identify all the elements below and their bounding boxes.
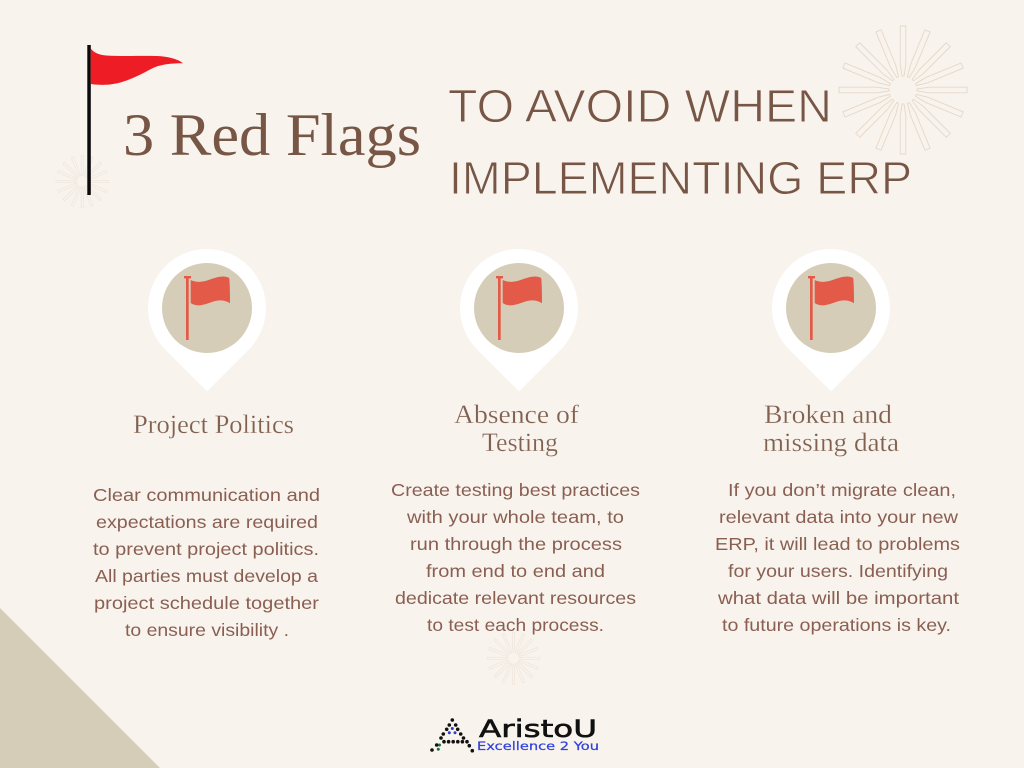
heading: broken and missing data: missing data <box>763 428 899 457</box>
starburst: beside flag <box>56 155 109 208</box>
heading: to avoid when implementing ERP <box>448 80 912 204</box>
text block: project politics <box>93 485 320 640</box>
heading: absence of testing: Testing <box>482 428 558 457</box>
logo: AristoU <box>430 715 599 753</box>
text block: absence of testing: run through the process <box>410 534 622 554</box>
text block: project politics: project schedule together <box>94 593 319 613</box>
starburst: middle column <box>487 632 540 685</box>
panel: project politics <box>93 410 320 640</box>
text block: broken and missing data <box>715 480 960 635</box>
text block: absence of testing <box>391 480 640 635</box>
text block: absence of testing: Create testing best practices <box>391 480 640 500</box>
icon: pin flag 3 <box>772 249 890 391</box>
heading: to avoid when implementing ERP: IMPLEMENTING ERP <box>449 152 912 204</box>
text block: broken and missing data: ERP, it will lead to problems <box>715 534 960 554</box>
logo tagline: Excellence 2 You <box>477 739 599 753</box>
heading: project politics: Project Politics <box>133 410 294 439</box>
text block: broken and missing data: what data will be important <box>717 588 959 608</box>
icon: pin flag 2 <box>460 249 578 391</box>
text block: project politics: to prevent project politics. <box>93 539 319 559</box>
heading: to avoid when implementing ERP: TO AVOID WHEN <box>448 80 832 132</box>
title: 3 Red Flags: 3 Red Flags <box>123 102 421 168</box>
icon: pin flag 1 <box>148 249 266 391</box>
text block: project politics: Clear communication and <box>93 485 320 505</box>
text block: absence of testing: with your whole team, to <box>406 507 624 527</box>
text block: broken and missing data: for your users. Identifying <box>728 561 948 581</box>
text block: project politics: All parties must develop a <box>95 566 318 586</box>
text block: project politics: to ensure visibility . <box>125 620 289 640</box>
icon: large red flag <box>87 45 183 195</box>
heading: absence of testing <box>454 400 579 457</box>
icon: logo dot triangle <box>430 718 474 752</box>
heading: broken and missing data <box>763 400 899 457</box>
corner triangle <box>0 608 160 768</box>
panel: broken and missing data <box>715 400 960 635</box>
text block: project politics: expectations are required <box>96 512 318 532</box>
text block: broken and missing data: If you don’t migrate clean, <box>728 480 956 500</box>
text block: absence of testing: to test each process. <box>427 615 604 635</box>
starburst: top right <box>839 26 967 154</box>
heading: broken and missing data: Broken and <box>764 400 892 429</box>
text block: broken and missing data: to future operations is key. <box>722 615 951 635</box>
text block: absence of testing: dedicate relevant resources <box>395 588 636 608</box>
text block: broken and missing data: relevant data into your new <box>719 507 958 527</box>
heading: absence of testing: Absence of <box>454 400 579 429</box>
panel: absence of testing <box>391 400 640 635</box>
text block: absence of testing: from end to end and <box>426 561 605 581</box>
logo wordmark: AristoU <box>479 715 597 743</box>
